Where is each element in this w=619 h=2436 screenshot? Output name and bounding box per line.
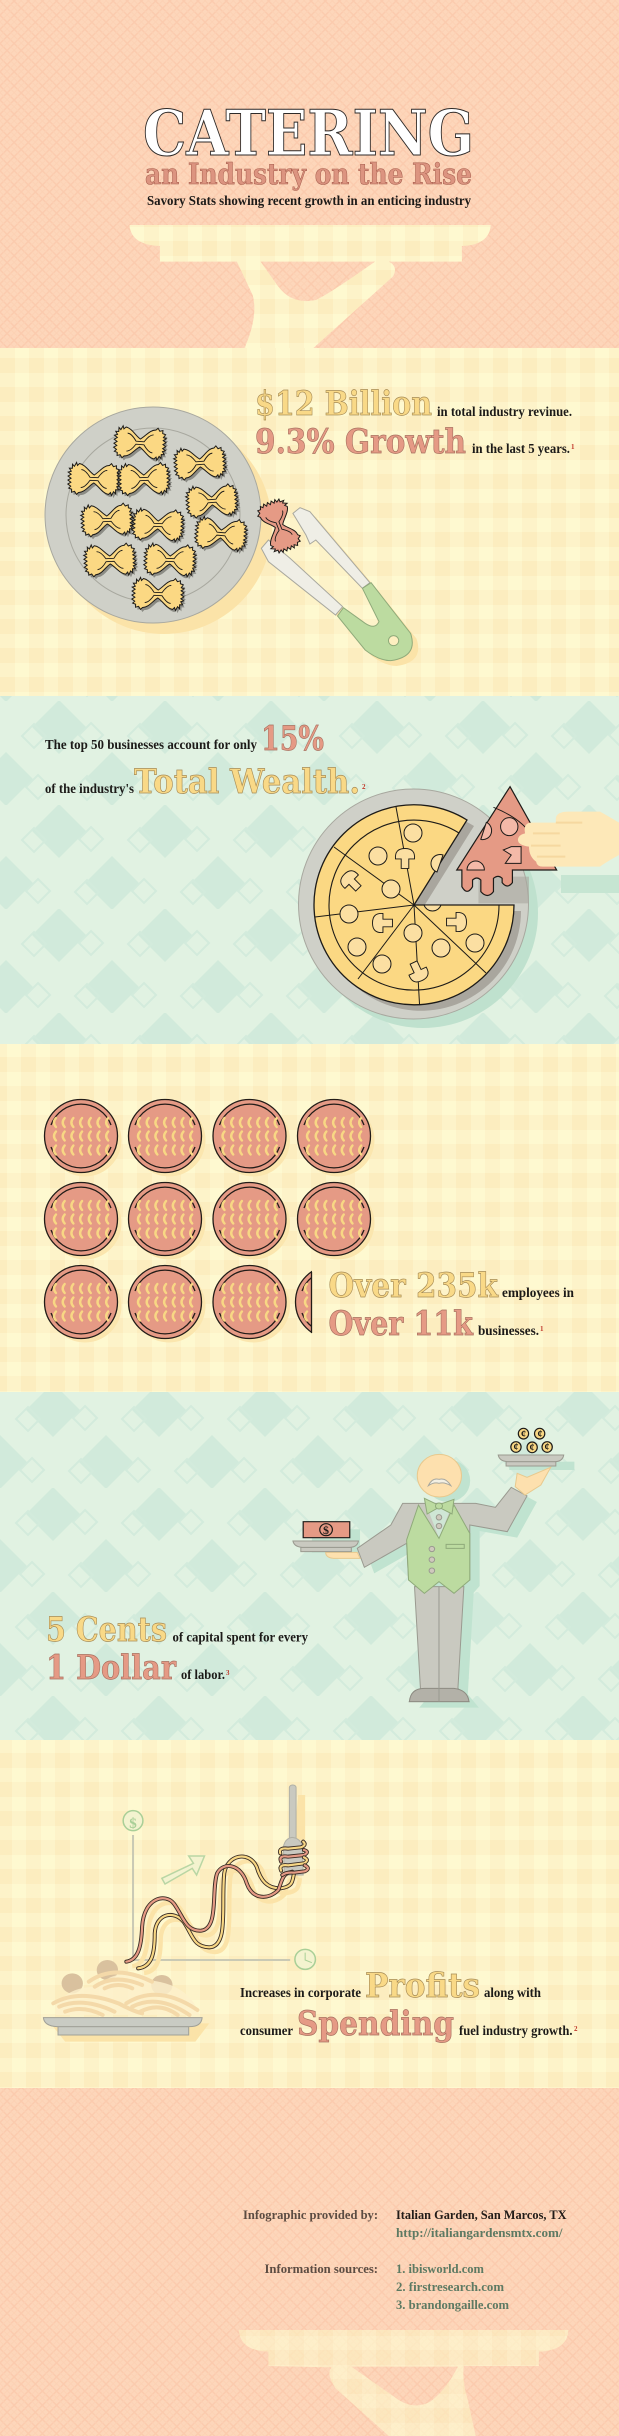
stat: 15 percent: The top 50 businesses account for only <box>45 738 257 753</box>
stat: businesses: Over 11k <box>328 1304 474 1344</box>
stat: spending: fuel industry growth. <box>459 2024 572 2039</box>
subtitle: an Industry on the Rise <box>145 157 472 191</box>
credit line <box>243 2207 567 2240</box>
stat: growth: in the last 5 years. <box>472 442 570 457</box>
stat: cents <box>46 1610 308 1650</box>
stat: spending <box>240 2004 578 2044</box>
information sources <box>264 2261 509 2312</box>
stat: growth: 1 <box>571 443 575 451</box>
stat: spending: Spending <box>297 2004 454 2044</box>
stat: cents: 5 Cents <box>46 1610 167 1650</box>
stat: spending: consumer <box>240 2024 293 2039</box>
stat: employees: Over 235k <box>328 1266 499 1306</box>
stat: total wealth <box>45 762 366 802</box>
stat: dollar: of labor. <box>181 1668 225 1683</box>
panel: profits and spending <box>0 1740 619 2088</box>
panel: footer <box>0 2088 619 2436</box>
stat: revenue <box>255 384 572 424</box>
icon: tongs <box>261 508 418 666</box>
panel: total wealth <box>0 696 619 1044</box>
panel: capital and labor <box>0 1392 619 1740</box>
stat: total wealth: Total Wealth. <box>134 762 360 802</box>
stat: businesses: businesses. <box>478 1324 539 1339</box>
credit line: Italian Garden, San Marcos, TX <box>396 2207 567 2222</box>
icon: dollar sign on bill: $ <box>323 1523 329 1537</box>
pizza on plate <box>298 789 538 1028</box>
title: CATERING <box>143 96 474 170</box>
stat: total wealth: 2 <box>362 783 366 791</box>
illustration: plate of spaghetti and meatballs <box>43 1960 209 2042</box>
icon: cent signs on coins: ¢ <box>530 1442 534 1454</box>
stat: dollar: 3 <box>226 1669 230 1677</box>
stat: total wealth: of the industry's <box>45 782 135 797</box>
icon: red farfalle <box>254 496 304 556</box>
icon: pizza slice <box>457 787 557 903</box>
stat: 15 percent <box>45 719 324 759</box>
credit line: Infographic provided by: <box>243 2207 378 2222</box>
stat: revenue: $12 Billion <box>255 384 432 424</box>
tagline: Savory Stats showing recent growth in an enticing industry <box>147 194 471 209</box>
icon: cent signs on coins: ¢ <box>538 1429 542 1440</box>
information sources: 1. ibisworld.com <box>396 2261 484 2276</box>
panel: revenue and growth <box>0 348 619 696</box>
icon: tray and hand silhouette <box>129 225 491 349</box>
stat: profits: Profits <box>365 1966 480 2006</box>
panel: employees and businesses <box>0 1044 619 1392</box>
stat: growth: 9.3% Growth <box>255 422 466 462</box>
icon: tray and hand silhouette <box>239 2330 568 2436</box>
stat: profits: Increases in corporate <box>240 1986 361 2001</box>
icon: cent signs on coins: ¢ <box>521 1429 526 1440</box>
information sources: Information sources: <box>264 2261 378 2276</box>
stat: spending: 2 <box>574 2025 578 2033</box>
stat: revenue: in total industry revinue. <box>437 405 572 420</box>
icon grid: pasta dishes <box>44 1100 374 1342</box>
illustration: waiter <box>293 1428 574 1708</box>
chart: noodle growth line <box>123 1785 315 1973</box>
icon: hand shadow <box>561 875 619 893</box>
stat: businesses: 1 <box>540 1325 544 1333</box>
stat: dollar: 1 Dollar <box>46 1648 177 1688</box>
icon: hand <box>518 812 619 867</box>
icon: cent signs on coins: ¢ <box>514 1442 518 1453</box>
icon: cent signs on coins: ¢ <box>544 1442 550 1453</box>
stat: 15 percent: 15% <box>261 719 324 759</box>
information sources: 3. brandongaille.com <box>396 2297 509 2312</box>
plate of farfalle <box>45 407 272 634</box>
information sources: 2. firstresearch.com <box>396 2279 504 2294</box>
stat: profits <box>240 1966 541 2006</box>
icon: dollar on axis: $ <box>129 1816 137 1832</box>
panel: header <box>0 0 619 349</box>
stat: profits: along with <box>484 1986 541 2001</box>
stat: cents: of capital spent for every <box>172 1630 308 1646</box>
credit line: http://italiangardensmtx.com/ <box>396 2225 563 2240</box>
stat: employees: employees in <box>502 1286 574 1301</box>
icon: cent signs on coins <box>514 1429 550 1454</box>
